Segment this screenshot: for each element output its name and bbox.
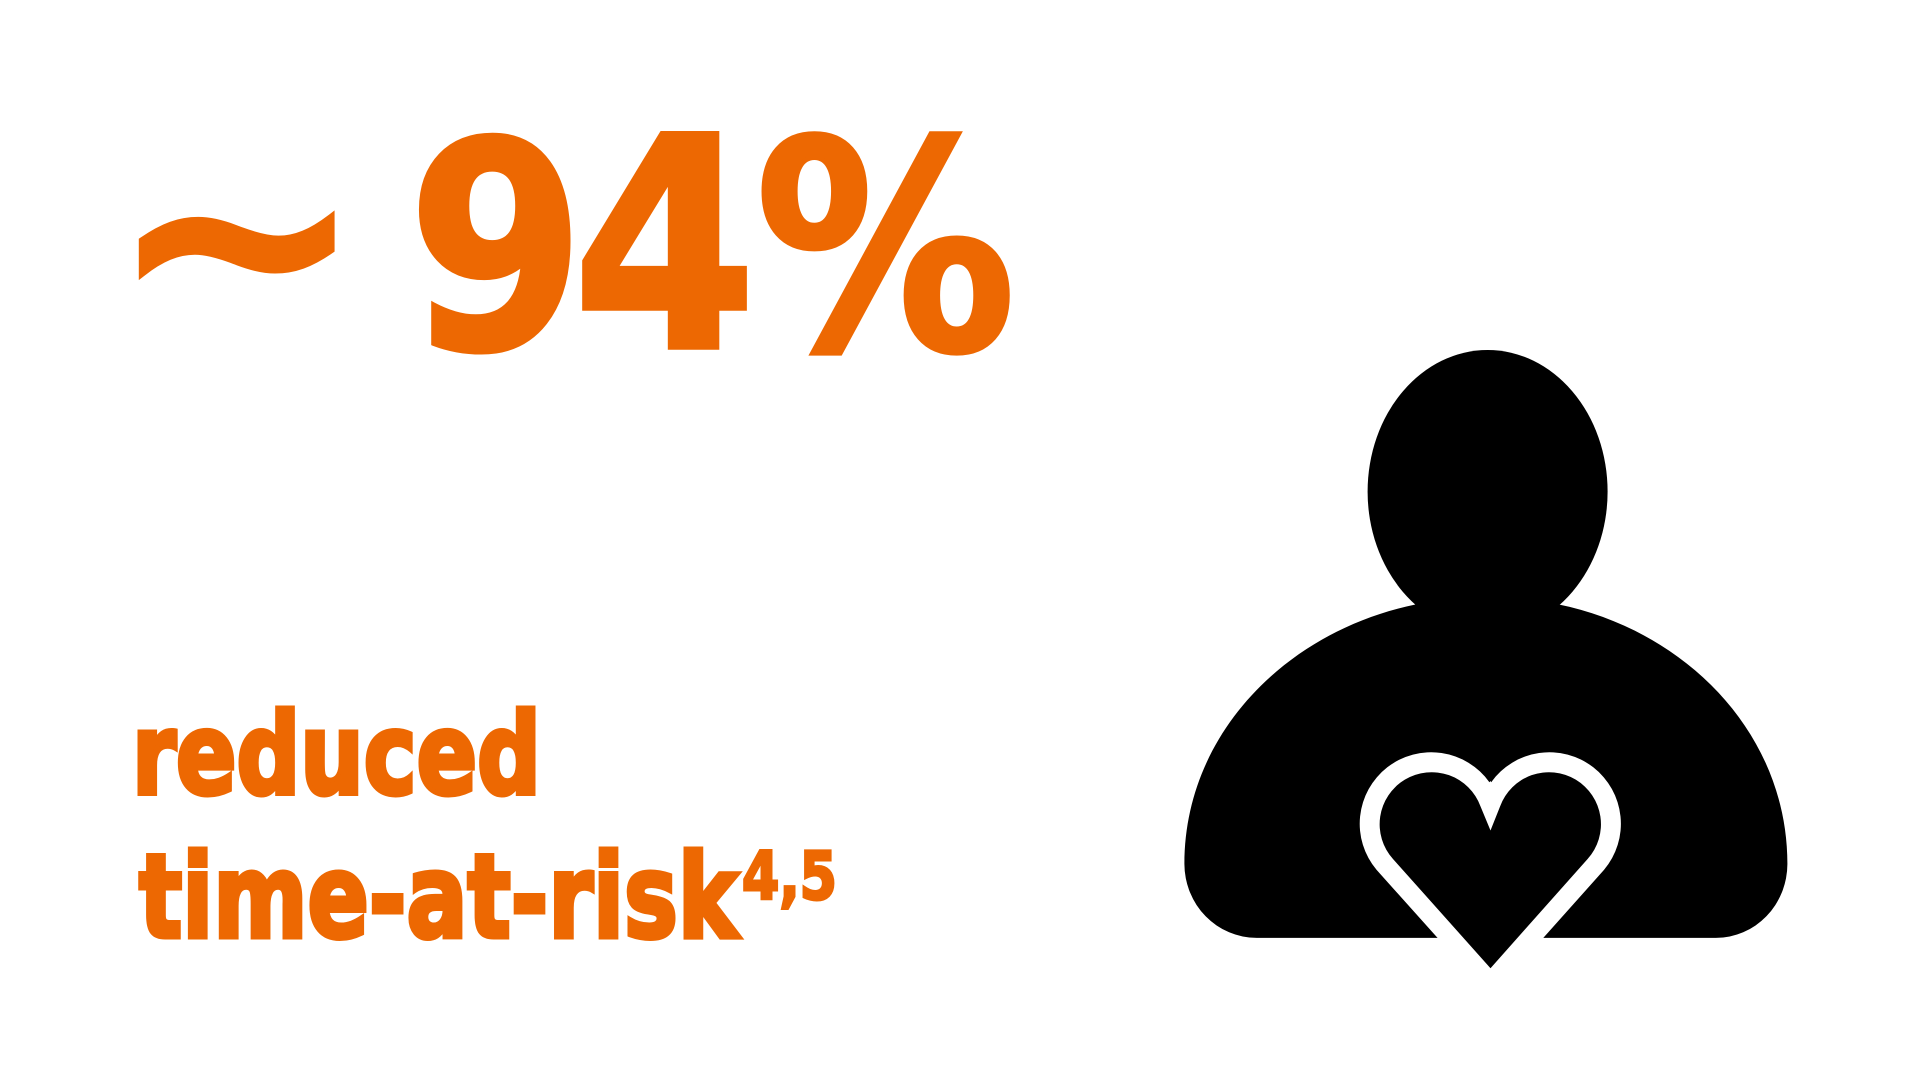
headline statistic: ~94%: % (755, 79, 1016, 417)
headline statistic: ~94%: 9 (408, 82, 585, 416)
caption: reduced time-at-risk (132, 690, 837, 965)
caption: reduced time-at-risk: 4,5 (742, 838, 837, 915)
headline statistic: ~94%: ~ (110, 74, 363, 399)
headline statistic: ~94% (110, 74, 1016, 417)
heart white outline (1360, 752, 1621, 997)
person head (1368, 350, 1608, 633)
icon: person with heart (1184, 350, 1787, 997)
heart (1380, 772, 1601, 968)
headline statistic: ~94%: 4 (572, 75, 757, 417)
caption: reduced time-at-risk: time-at-risk (139, 830, 740, 965)
caption: reduced time-at-risk: reduced (132, 690, 541, 820)
person body (1184, 604, 1787, 938)
